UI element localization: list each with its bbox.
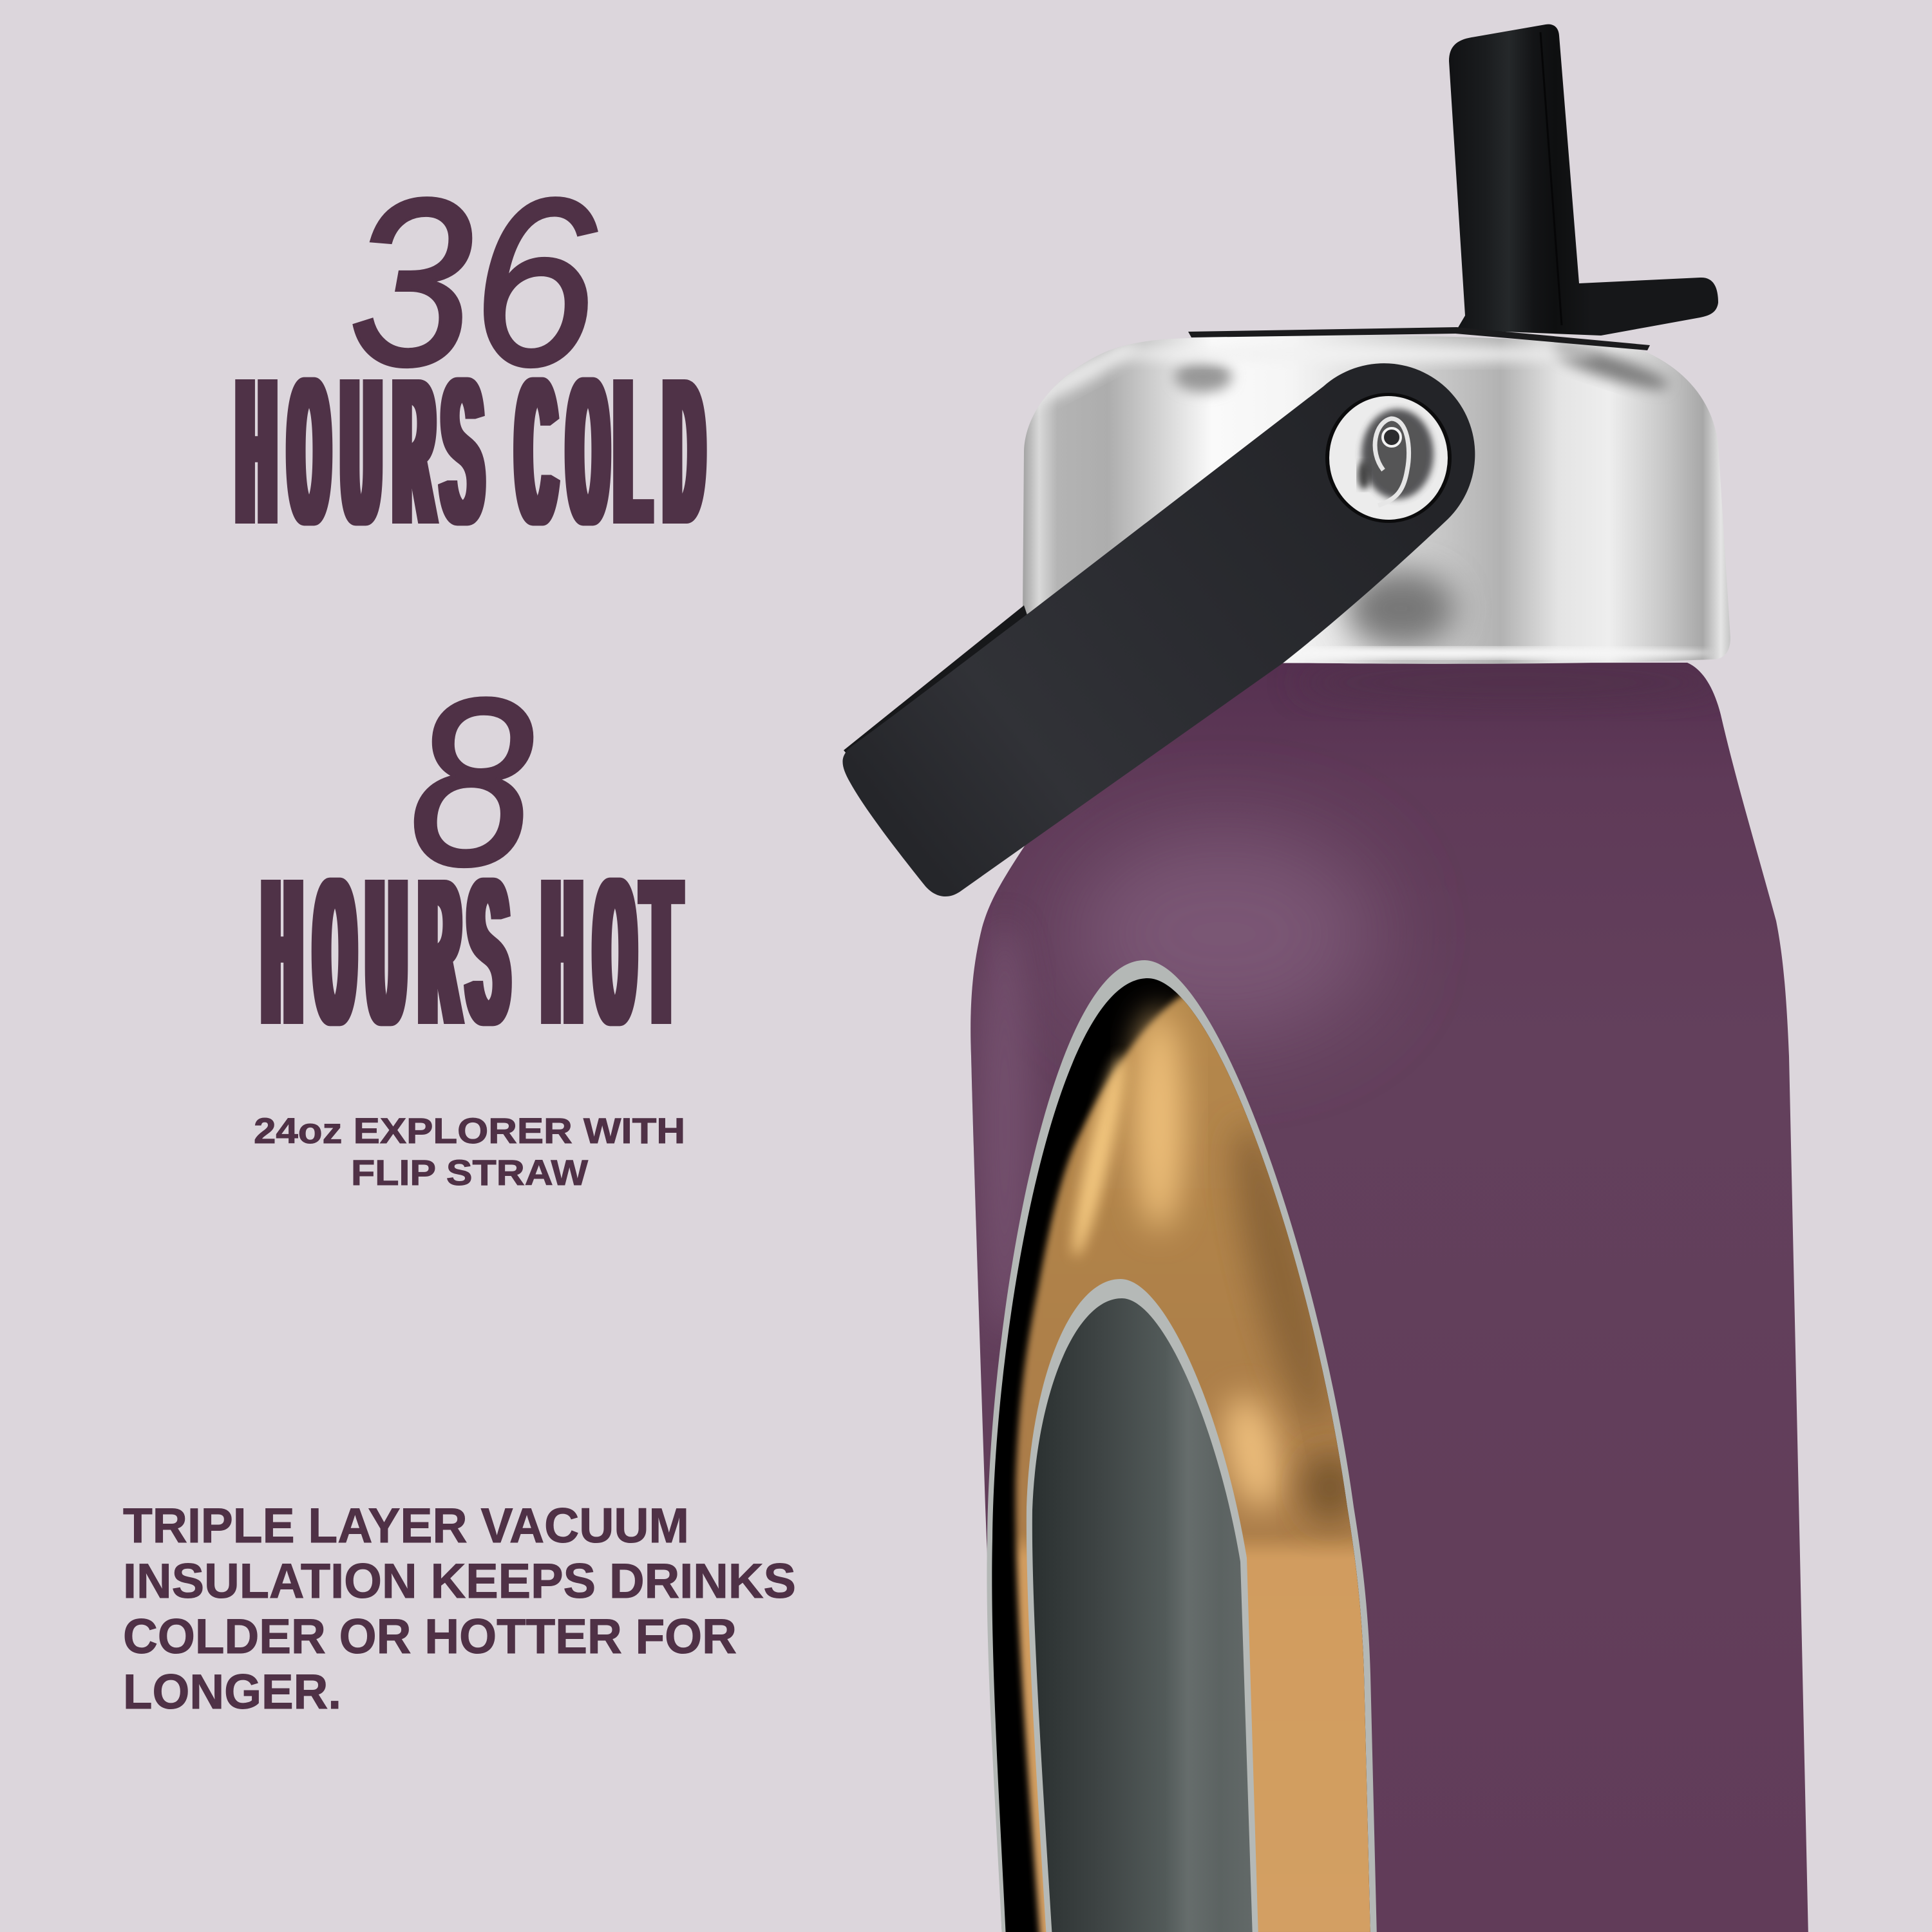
steel cap bbox=[1018, 327, 1739, 670]
inner rim bbox=[1027, 1279, 1258, 1932]
handle back strap bbox=[844, 605, 1037, 773]
product name line 1: 24oz EXPLORER WITH bbox=[254, 1110, 685, 1151]
heading: hours cold: HOURS COLD bbox=[235, 341, 705, 589]
outer rim bbox=[987, 960, 1377, 1932]
bottle illustration bbox=[843, 24, 1816, 1932]
heading: hours hot: HOURS HOT bbox=[261, 842, 683, 1090]
product name line 2: FLIP STRAW bbox=[351, 1152, 588, 1193]
stat: 8 hours hot bbox=[261, 649, 683, 1090]
description line 4: LONGER. bbox=[123, 1665, 341, 1719]
carry handle bbox=[843, 363, 1475, 896]
black vacuum gap bbox=[992, 978, 1370, 1932]
copper layer bbox=[1010, 990, 1370, 1932]
inner steel wall bbox=[1032, 1298, 1253, 1932]
description line 1: TRIPLE LAYER VACUUM bbox=[123, 1499, 689, 1553]
product name bbox=[254, 1110, 685, 1193]
straw bbox=[1449, 24, 1718, 336]
lid top edge bbox=[1188, 327, 1650, 350]
description line 2: INSULATION KEEPS DRINKS bbox=[123, 1554, 796, 1609]
bottle body bbox=[966, 657, 1816, 1932]
description line 3: COLDER OR HOTTER FOR bbox=[123, 1609, 737, 1664]
rivet bbox=[1325, 393, 1452, 523]
number 8: 8 bbox=[410, 649, 535, 915]
stat: 36 hours cold bbox=[235, 149, 705, 589]
description text bbox=[123, 1499, 796, 1719]
cutaway window: vacuum layers bbox=[987, 960, 1417, 1932]
handle front strap bbox=[843, 363, 1475, 896]
number 36: 36 bbox=[349, 149, 598, 415]
